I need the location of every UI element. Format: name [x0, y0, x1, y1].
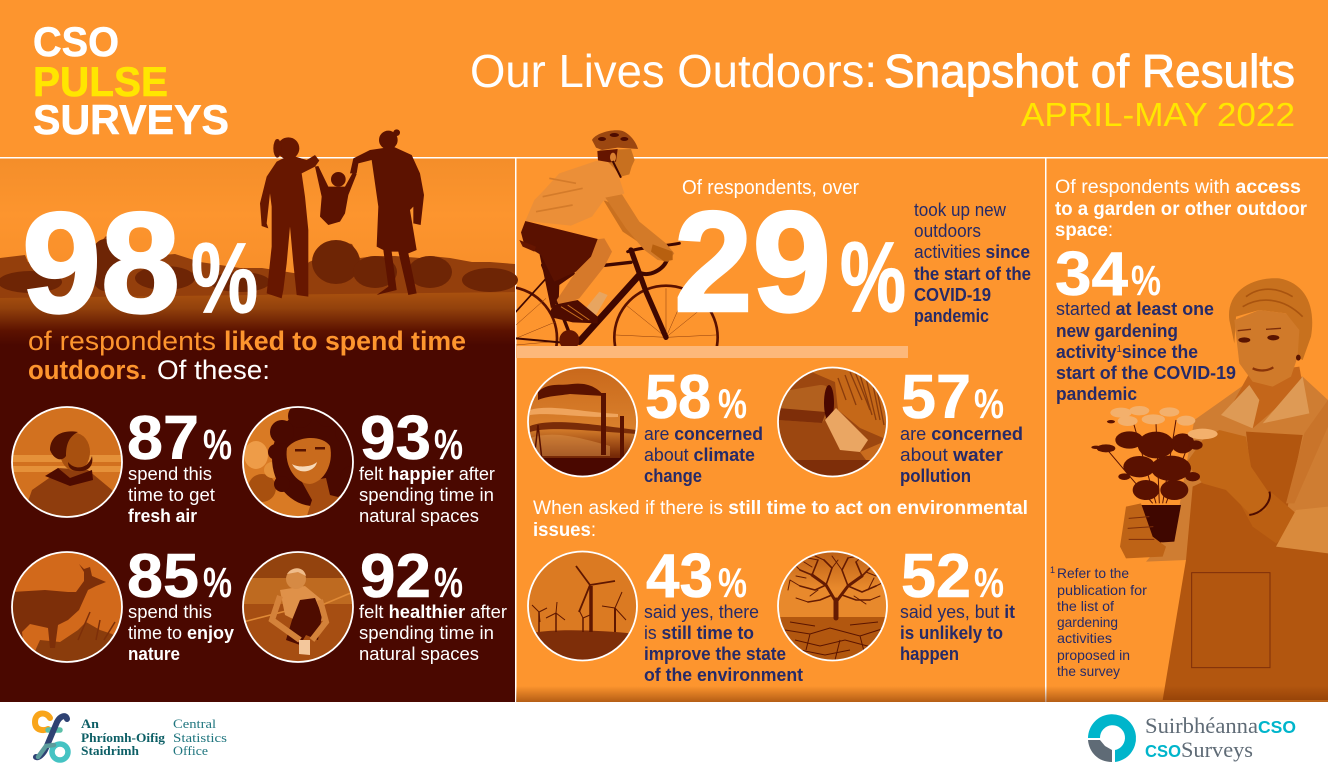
logo mark: [1088, 714, 1136, 762]
logo wordmark: [1145, 713, 1296, 762]
stat: 87 percent: 87: [127, 404, 199, 473]
stat: 85 percent: %: [203, 559, 232, 607]
stat: 57 percent: [900, 363, 1023, 486]
panel: left, 98 percent: [0, 129, 518, 702]
stat: 93 percent: natural spaces: [359, 505, 479, 526]
heading: 98 percent: 98: [22, 184, 180, 343]
face: [1234, 310, 1299, 387]
icon: runner tying shoe: [243, 552, 353, 662]
crank: [559, 330, 580, 346]
logo wordmark: Office: [173, 743, 208, 758]
logo wordmark: Staidrimh: [81, 743, 140, 758]
tree line: [0, 236, 518, 298]
stat: 34 percent: [1055, 240, 1161, 309]
text: of respondents with access: Of respondents with access: [1055, 176, 1301, 198]
icon: dead tree on cracked earth: [778, 551, 888, 662]
apron: [1163, 432, 1328, 700]
stat: 43 percent: [644, 542, 803, 685]
logo wordmark: Statistics: [173, 730, 227, 745]
text: took up new outdoors activities: took up new: [914, 200, 1007, 220]
stat: 58 percent: are concerned: [644, 424, 763, 444]
hand: [651, 244, 673, 262]
neck: [1233, 367, 1303, 428]
plant pot: [1141, 505, 1181, 543]
stat: 52 percent: is unlikely to: [900, 623, 1003, 643]
header: CSO Pulse Surveys logo text: PULSE: [33, 58, 168, 105]
rear wheel: [516, 286, 558, 346]
family silhouette: [260, 129, 424, 298]
text: when asked if there is still time: issues:: [533, 519, 596, 541]
logo wordmark: Phríomh-Oifig: [81, 730, 166, 745]
stat: 43 percent: 43: [646, 542, 713, 611]
stat: 57 percent: are concerned: [900, 424, 1023, 444]
footnote: proposed in: [1057, 647, 1130, 663]
text: of respondents with access: [1055, 176, 1307, 241]
text: liked to spend time outdoors: outdoors.: [28, 355, 147, 385]
hair: [1229, 278, 1312, 360]
front wheel: [616, 288, 716, 337]
header: CSO Pulse Surveys logo text: [33, 18, 229, 143]
stat: 34 percent: 34: [1055, 240, 1129, 309]
stat: 29 percent: [674, 183, 906, 342]
icon: man breathing air: [12, 407, 122, 520]
icon: deer: [12, 552, 122, 662]
near leg: [557, 238, 612, 307]
text: liked to spend time outdoors: of respondents: [28, 326, 216, 356]
stat: 58 percent: 58: [645, 363, 711, 432]
stat: 52 percent: %: [974, 559, 1004, 606]
text: started at least one new gardening activity: since the: [1122, 342, 1198, 362]
logo wordmark: Central: [173, 716, 216, 731]
head: [599, 149, 635, 177]
text: when asked if there is still time: When asked if there is still time to act on environmental: [533, 497, 1028, 519]
light bar: [516, 346, 908, 358]
illustration: gardener woman: [1091, 278, 1328, 700]
text: took up new outdoors activities: pandemic: [914, 306, 989, 326]
stat: 52 percent: said yes, but it: [900, 602, 1015, 622]
heading: 98 percent: %: [191, 222, 258, 333]
text: took up new outdoors activities: [914, 200, 1031, 326]
shirt and shoulders: [1146, 377, 1328, 562]
stat: 85 percent: nature: [128, 643, 180, 664]
stat: 87 percent: time to get: [128, 484, 215, 505]
stat: 58 percent: [644, 363, 763, 486]
stat: 92 percent: spending time in: [359, 622, 494, 643]
text: when asked if there is still time: [533, 497, 1028, 541]
stat: 57 percent: pollution: [900, 466, 971, 486]
footnote: activities: [1057, 630, 1112, 646]
sleeve cuff: [1276, 507, 1328, 553]
child: [315, 166, 357, 225]
holding hand: [1120, 503, 1166, 558]
stat: 85 percent: [127, 542, 235, 664]
logo wordmark: An: [81, 716, 100, 731]
text: started at least one new gardening activity: 1: [1116, 344, 1122, 355]
text: took up new outdoors activities: COVID-19: [914, 285, 991, 305]
footnote: the list of: [1057, 598, 1114, 614]
logo wordmark: [81, 716, 227, 758]
text: started at least one new gardening activity: start of the COVID-19: [1056, 363, 1236, 383]
far arm: [604, 200, 636, 241]
ground and dark lower panel: [0, 288, 515, 702]
header: CSO Pulse Surveys logo text: SURVEYS: [33, 96, 229, 143]
panel: right, gardening: [1050, 176, 1328, 700]
stat: 87 percent: spend this: [128, 463, 212, 484]
saddle: [519, 240, 536, 252]
stat: 92 percent: felt healthier after: [359, 601, 507, 622]
text: started at least one new gardening activity: new gardening: [1056, 321, 1178, 341]
logo wordmark: CSO: [1258, 717, 1296, 737]
stat: 93 percent: [359, 404, 495, 526]
stat: 57 percent: about water: [900, 445, 1003, 465]
text: liked to spend time outdoors: [28, 326, 466, 385]
title: Our Lives Outdoors:: [470, 45, 877, 97]
helmet: [592, 130, 638, 150]
left panel sky: [0, 158, 515, 318]
near arm: [605, 194, 674, 262]
text: started at least one new gardening activity: started at least one: [1056, 299, 1214, 319]
logo wordmark: Suirbhéanna: [1145, 713, 1258, 738]
stat: 58 percent: %: [718, 380, 747, 427]
stat: 93 percent: 93: [360, 404, 431, 473]
stat: 85 percent: spend this: [128, 601, 212, 622]
stat: 87 percent: %: [203, 421, 232, 469]
glove: [1188, 430, 1268, 504]
logo mark: [35, 713, 68, 760]
stat: 43 percent: said yes, there: [644, 602, 759, 622]
text: liked to spend time outdoors: liked to spend time: [224, 326, 466, 356]
bike frame: [516, 243, 679, 343]
text: took up new outdoors activities: activities since: [914, 242, 1030, 262]
stat: 43 percent: is still time to: [644, 623, 754, 643]
collar: [1221, 377, 1309, 428]
text: took up new outdoors activities: outdoors: [914, 221, 981, 241]
bottle: [584, 292, 608, 315]
woman: [260, 137, 319, 298]
text: of respondents, over: Of respondents, over: [682, 177, 859, 199]
stat: 29 percent: %: [840, 221, 906, 332]
stat: 87 percent: [127, 404, 232, 526]
stat: 52 percent: 52: [901, 542, 971, 611]
text: of respondents with access: to a garden or other outdoor: [1055, 198, 1307, 220]
icon: smiling woman: [242, 406, 354, 518]
text: started at least one new gardening activity: [1056, 299, 1236, 404]
text: started at least one new gardening activity: activity: [1056, 342, 1118, 362]
plant stems: [1106, 420, 1193, 503]
footnote: Refer to the: [1057, 565, 1129, 581]
heading: 98 percent: [22, 184, 258, 343]
text: started at least one new gardening activity: pandemic: [1056, 384, 1137, 404]
stat: 57 percent: 57: [901, 363, 971, 432]
icon: water pollution pipe: [778, 367, 888, 478]
stat: 34 percent: %: [1131, 257, 1161, 305]
stat: 92 percent: %: [434, 559, 463, 607]
man: [350, 129, 424, 295]
icon: factory chimneys: [528, 367, 638, 478]
header: CSO Pulse Surveys logo text: CSO: [33, 18, 119, 65]
text: liked to spend time outdoors: Of these:: [157, 355, 270, 385]
stat: 85 percent: time to enjoy: [128, 622, 235, 643]
logo wordmark: CSO: [1145, 741, 1181, 761]
apron pocket: [1192, 573, 1270, 668]
stat: 92 percent: 92: [360, 542, 431, 611]
flowers: [1110, 406, 1218, 439]
footnote: the survey: [1057, 663, 1120, 679]
shorts: [521, 221, 598, 282]
far leg: [539, 253, 576, 308]
stat: 43 percent: of the environment: [644, 665, 803, 685]
title: APRIL-MAY 2022: [1021, 96, 1295, 133]
footnote: gardening: [1057, 614, 1118, 630]
stat: 87 percent: fresh air: [128, 505, 197, 526]
stat: 93 percent: spending time in: [359, 484, 494, 505]
stat: 92 percent: [359, 542, 507, 664]
shirt: [525, 161, 624, 226]
stat: 58 percent: change: [644, 466, 702, 486]
stat: 58 percent: about climate: [644, 445, 755, 465]
plant leaves: [1091, 420, 1203, 500]
panel: middle, 29 percent: [516, 130, 1030, 681]
title: [470, 45, 1295, 133]
stat: 93 percent: %: [434, 421, 463, 469]
text: of respondents with access: space:: [1055, 219, 1113, 241]
logo wordmark: Surveys: [1181, 737, 1253, 762]
text: took up new outdoors activities: the start of the: [914, 264, 1031, 284]
footnote: 1: [1050, 565, 1055, 575]
footnote: publication for: [1057, 582, 1147, 598]
footnote: [1050, 565, 1147, 679]
stat: 43 percent: %: [718, 559, 747, 606]
shoe: [549, 300, 598, 323]
forearm: [1242, 494, 1294, 543]
stat: 93 percent: felt happier after: [359, 463, 495, 484]
stat: 57 percent: %: [974, 380, 1004, 427]
logo: Central Statistics Office: [35, 713, 227, 760]
apron strap: [1286, 400, 1328, 503]
stat: 43 percent: improve the state: [644, 644, 786, 664]
stat: 52 percent: [900, 542, 1015, 664]
stat: 29 percent: 29: [674, 183, 831, 342]
icon: cyclist: [516, 130, 719, 346]
stat: 52 percent: happen: [900, 644, 959, 664]
title: Snapshot of Results: [884, 45, 1295, 97]
stat: 85 percent: 85: [127, 542, 199, 611]
logo: CSO Surveys: [1088, 713, 1296, 762]
icon: wind turbines: [528, 551, 638, 661]
stat: 92 percent: natural spaces: [359, 643, 479, 664]
